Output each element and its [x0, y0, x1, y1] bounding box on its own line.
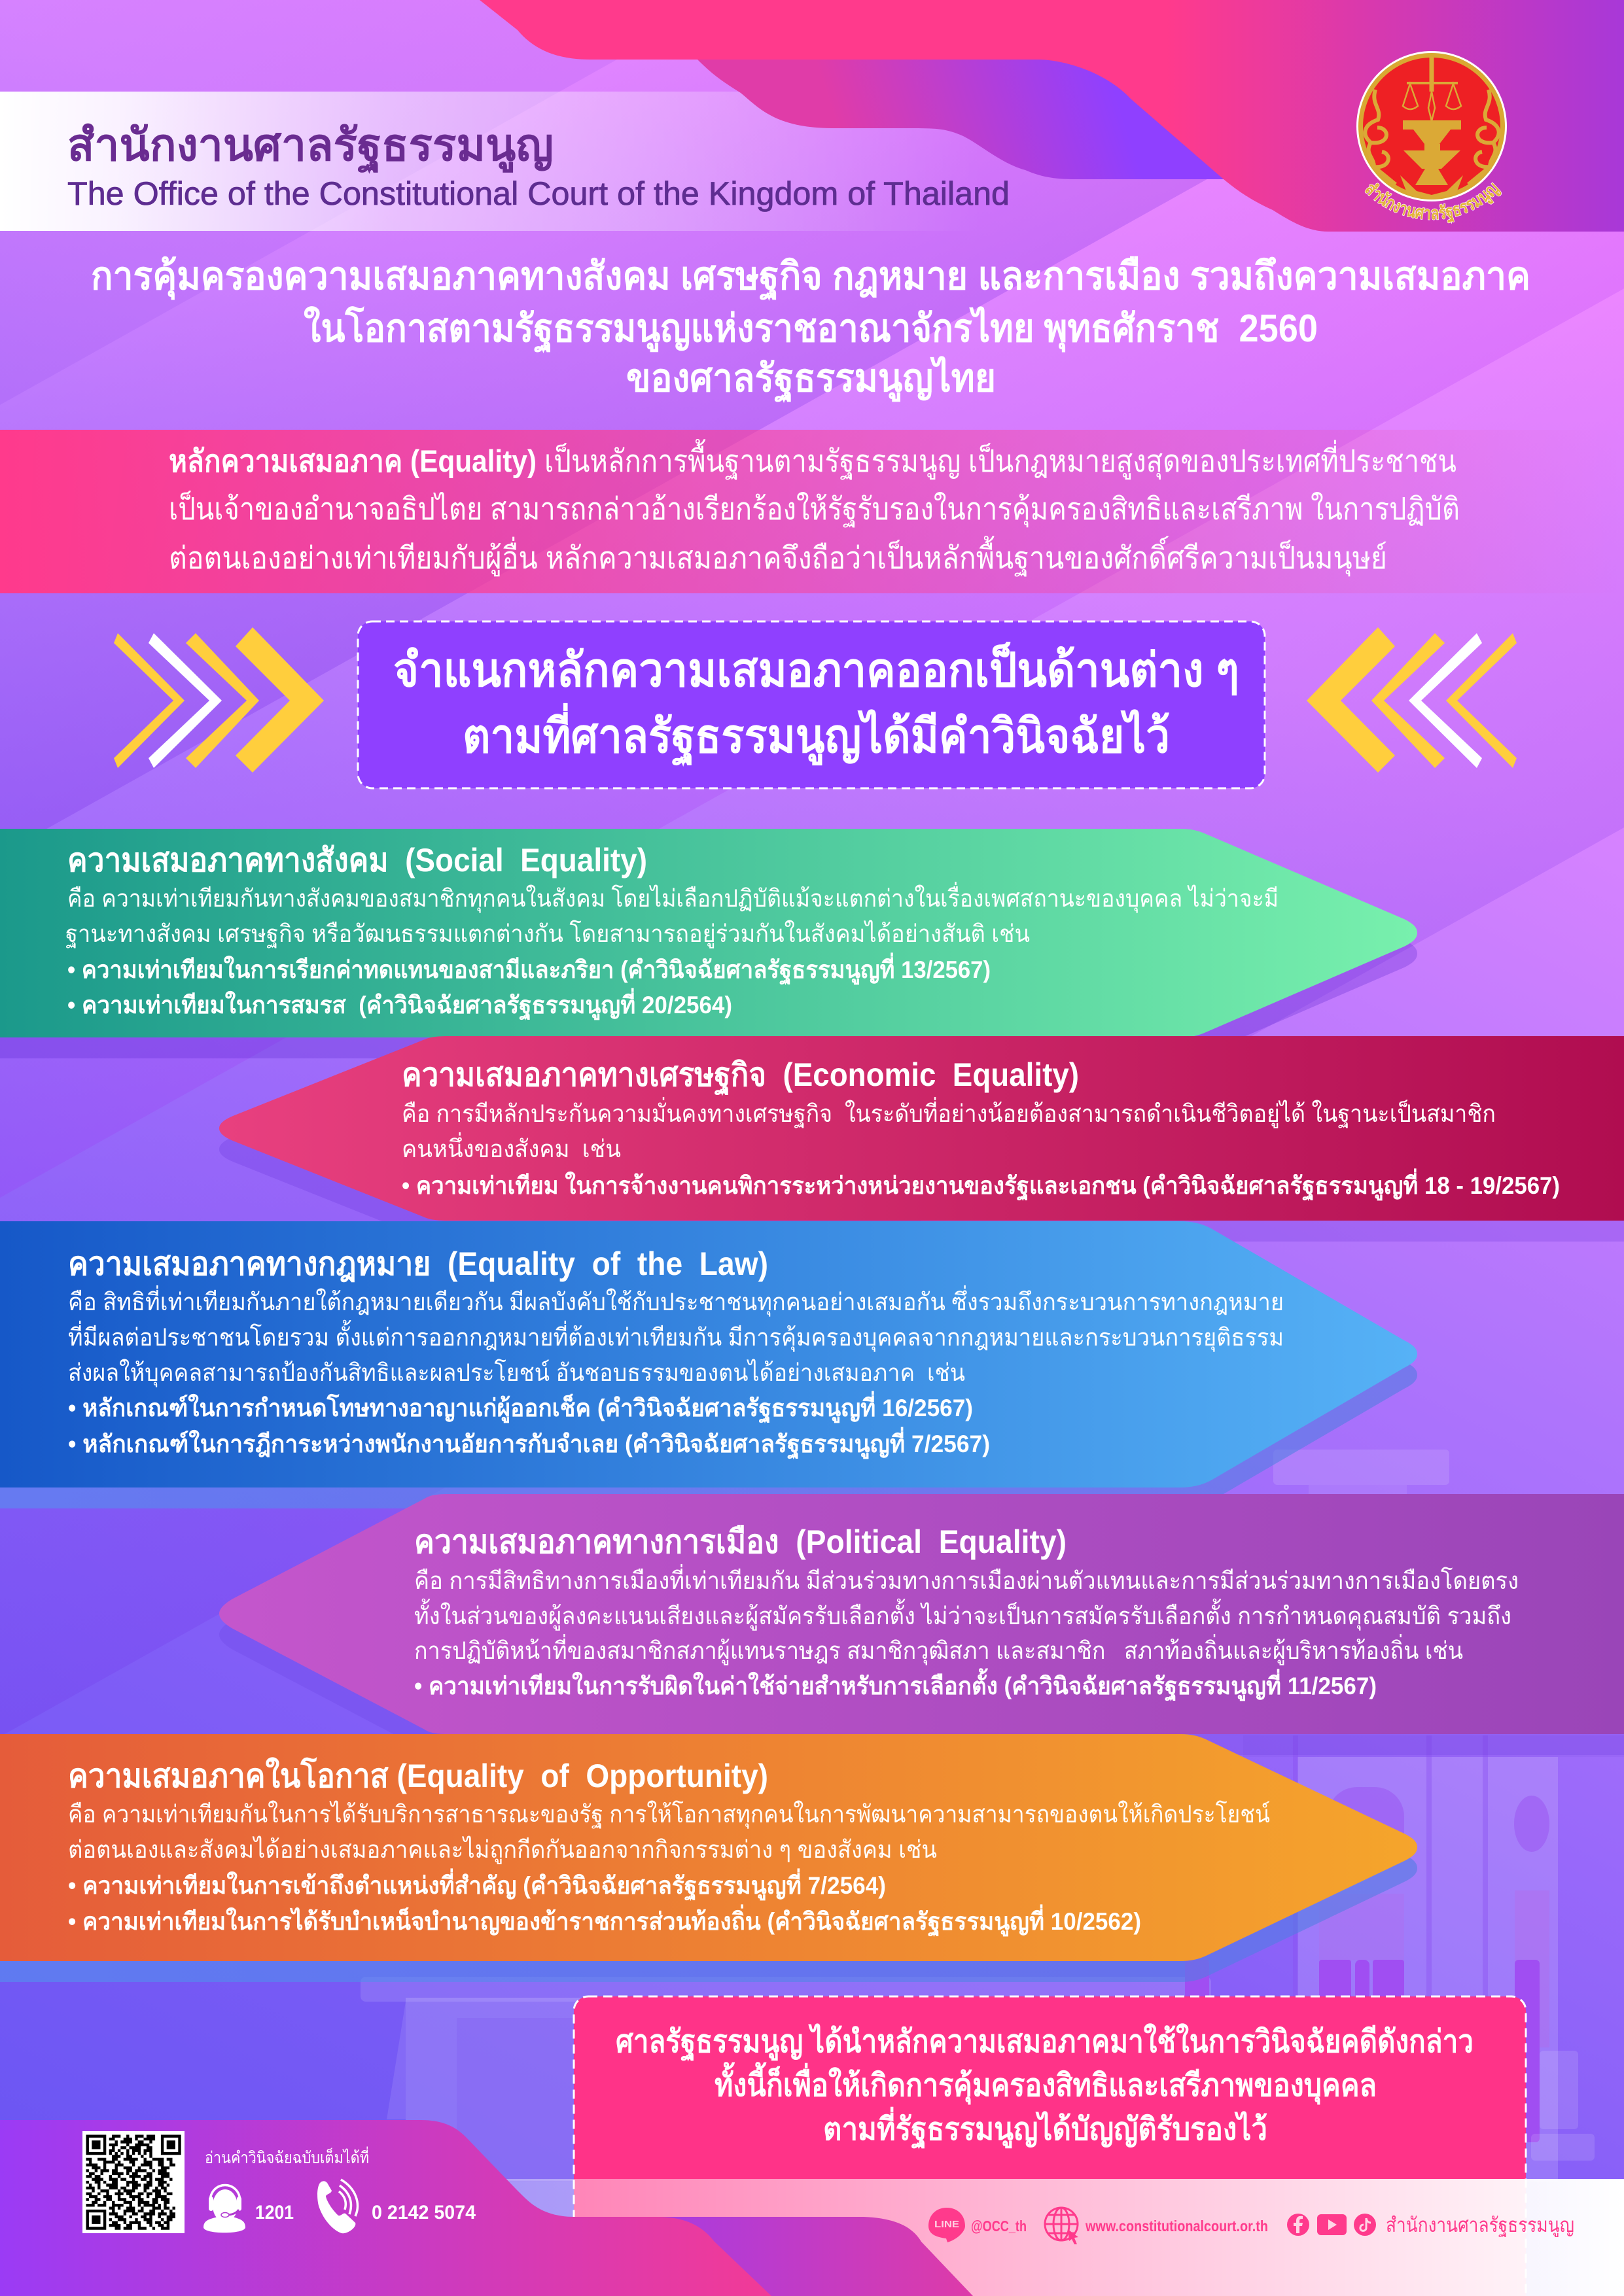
panel: equality of the law: [0, 1221, 1417, 1508]
economic equality text: คนหนึ่งของสังคม เช่น: [402, 1132, 621, 1162]
caption: read full ruling: อ่านคำวินิจฉัยฉบับเต็มได้ที่: [205, 2146, 369, 2167]
social equality heading: ความเสมอภาคทางสังคม (Social Equality): [67, 842, 647, 878]
icon: left chevrons: [114, 627, 324, 773]
icon: tiktok: [1354, 2214, 1376, 2236]
label: social account: สำนักงานศาลรัฐธรรมนูญ: [1386, 2214, 1574, 2237]
social equality text: • ความเท่าเทียมในการเรียกค่าทดแทนของสามีและภริยา (คำวินิจฉัยศาลรัฐธรรมนูญที่ 13/2567): [67, 952, 991, 985]
law text: • หลักเกณฑ์ในการกำหนดโทษทางอาญาแก่ผู้ออกเช็ค (คำวินิจฉัยศาลรัฐธรรมนูญที่ 16/2567): [68, 1391, 973, 1423]
panel: equality definition: [0, 430, 1624, 593]
callout: closing statement: ตามที่รัฐธรรมนูญได้บัญญัติรับรองไว้: [823, 2106, 1267, 2149]
definition text: เป็นเจ้าของอำนาจอธิปไตย สามารถกล่าวอ้างเรียกร้องให้รัฐรับรองในการคุ้มครองสิทธิและเสรีภาพ ในการปฏิบัติ: [169, 490, 1460, 528]
opportunity text: [68, 1800, 1270, 1937]
callout: closing statement: ศาลรัฐธรรมนูญ ได้นำหลักความเสมอภาคมาใช้ในการวินิจฉัยคดีดังกล่าว: [616, 2023, 1474, 2062]
callout: classification box: [358, 621, 1265, 788]
icon: line: [928, 2208, 965, 2242]
callout: classification box: ตามที่ศาลรัฐธรรมนูญได้มีคำวินิจฉัยไว้: [463, 703, 1170, 767]
law text: คือ สิทธิที่เท่าเทียมกันภายใต้กฎหมายเดียวกัน มีผลบังคับใช้กับประชาชนทุกคนอย่างเสมอกัน ซึ่งรวมถึงกระบวนการทางกฎหมาย: [68, 1285, 1284, 1317]
political text: [414, 1563, 1519, 1701]
definition text: [169, 439, 1460, 577]
header ribbon: second layer: [697, 52, 1230, 179]
definition text: ต่อตนเองอย่างเท่าเทียมกับผู้อื่น หลักความเสมอภาคจึงถือว่าเป็นหลักพื้นฐานของศักดิ์ศรีความเป็นมนุษย์: [169, 536, 1387, 577]
political heading: ความเสมอภาคทางการเมือง (Political Equality): [414, 1523, 1067, 1560]
law text: ส่งผลให้บุคคลสามารถป้องกันสิทธิและผลประโยชน์ อันชอบธรรมของตนได้อย่างเสมอภาค เช่น: [68, 1359, 965, 1387]
header heading: [67, 120, 1010, 212]
callout: closing statement: ทั้งนี้ก็เพื่อให้เกิดการคุ้มครองสิทธิและเสรีภาพของบุคคล: [715, 2062, 1377, 2105]
icon: globe: [1045, 2208, 1078, 2244]
header white band: [0, 92, 981, 231]
economic equality heading: ความเสมอภาคทางเศรษฐกิจ (Economic Equality): [402, 1056, 1079, 1096]
callout: closing statement: [574, 1996, 1526, 2296]
title: ของศาลรัฐธรรมนูญไทย: [626, 355, 996, 403]
english heading: The Office of the Constitutional Court of the Kingdom of Thailand: [67, 175, 1010, 212]
footer ribbon: back: [654, 2217, 973, 2296]
social equality text: ฐานะทางสังคม เศรษฐกิจ หรือวัฒนธรรมแตกต่างกัน โดยสามารถอยู่ร่วมกันในสังคมได้อย่างสันติ เช่น: [65, 920, 1030, 948]
title: [91, 254, 1530, 403]
title: ในโอกาสตามรัฐธรรมนูญแห่งราชอาณาจักรไทย พุทธศักราช 2560: [304, 305, 1318, 353]
label: hotline number: 1201: [255, 2202, 294, 2223]
icon: call centre agent: [203, 2185, 245, 2233]
icon: telephone: [317, 2180, 357, 2233]
political text: การปฏิบัติหน้าที่ของสมาชิกสภาผู้แทนราษฎร สมาชิกวุฒิสภา และสมาชิก สภาท้องถิ่นและผู้บริหารท้องถิ่น เช่น: [414, 1633, 1463, 1665]
opportunity text: ต่อตนเองและสังคมได้อย่างเสมอภาคและไม่ถูกกีดกันออกจากกิจกรรมต่าง ๆ ของสังคม เช่น: [68, 1835, 937, 1864]
social equality text: [65, 881, 1279, 1020]
social equality text: • ความเท่าเทียมในการสมรส (คำวินิจฉัยศาลรัฐธรรมนูญที่ 20/2564): [67, 988, 732, 1020]
background building illustration: [361, 1450, 1624, 2182]
definition text: เป็นหลักการพื้นฐานตามรัฐธรรมนูญ เป็นกฎหมายสูงสุดของประเทศที่ประชาชน: [544, 439, 1456, 480]
opportunity heading: ความเสมอภาคในโอกาส (Equality of Opportunity): [68, 1756, 768, 1794]
economic equality text: [402, 1096, 1560, 1201]
political text: ทั้งในส่วนของผู้ลงคะแนนเสียงและผู้สมัครรับเลือกตั้ง ไม่ว่าจะเป็นการสมัครรับเลือกตั้ง การกำหนดคุณสมบัติ รวมถึง: [414, 1598, 1511, 1631]
economic equality text: คือ การมีหลักประกันความมั่นคงทางเศรษฐกิจ ในระดับที่อย่างน้อยต้องสามารถดำเนินชีวิตอยู่ได้ ในฐานะเป็นสมาชิก: [402, 1096, 1496, 1128]
footer light band: [0, 2179, 1624, 2296]
callout: classification box: จำแนกหลักความเสมอภาคออกเป็นด้านต่าง ๆ: [393, 642, 1239, 697]
opportunity text: • ความเท่าเทียมในการเข้าถึงตำแหน่งที่สำคัญ (คำวินิจฉัยศาลรัฐธรรมนูญที่ 7/2564): [68, 1868, 886, 1901]
QR code: [82, 2131, 185, 2233]
icon: facebook: [1287, 2214, 1309, 2236]
social equality text: คือ ความเท่าเทียมกันทางสังคมของสมาชิกทุกคนในสังคม โดยไม่เลือกปฏิบัติแม้จะแตกต่างในเรื่องเพศสถานะของบุคคล ไม่ว่าจะมี: [67, 881, 1279, 913]
panel: social equality: [0, 829, 1417, 1058]
title: การคุ้มครองความเสมอภาคทางสังคม เศรษฐกิจ กฎหมาย และการเมือง รวมถึงความเสมอภาค: [91, 254, 1530, 301]
icon: court emblem: [1356, 51, 1507, 224]
opportunity text: คือ ความเท่าเทียมกันในการได้รับบริการสาธารณะของรัฐ การให้โอกาสทุกคนในการพัฒนาความสามารถของตนให้เกิดประโยชน์: [68, 1800, 1270, 1829]
economic equality text: • ความเท่าเทียม ในการจ้างงานคนพิการระหว่างหน่วยงานของรัฐและเอกชน (คำวินิจฉัยศาลรัฐธรรมนูญที่ 18 - 19/2567): [402, 1168, 1560, 1201]
header ribbon: pink: [480, 0, 1624, 232]
law text: • หลักเกณฑ์ในการฎีการะหว่างพนักงานอัยการกับจำเลย (คำวินิจฉัยศาลรัฐธรรมนูญที่ 7/2567): [68, 1427, 990, 1459]
law text: [68, 1285, 1284, 1459]
panel: political equality: [219, 1494, 1624, 1755]
law heading: ความเสมอภาคทางกฎหมาย (Equality of the Law): [68, 1245, 768, 1282]
icon: line: LINE: [934, 2219, 959, 2230]
icon: right chevrons: [1307, 627, 1517, 773]
label: telephone number: 0 2142 5074: [372, 2202, 476, 2223]
footer ribbon: front: [0, 2120, 771, 2296]
law text: ที่มีผลต่อประชาชนโดยรวม ตั้งแต่การออกกฎหมายที่ต้องเท่าเทียมกัน มีการคุ้มครองบุคคลจากกฎหมายและกระบวนการยุติธรรม: [68, 1319, 1284, 1352]
opportunity text: • ความเท่าเทียมในการได้รับบำเหน็จบำนาญของข้าราชการส่วนท้องถิ่น (คำวินิจฉัยศาลรัฐธรรมนูญที่ 10/2562): [68, 1904, 1141, 1937]
icon: youtube: [1317, 2214, 1347, 2235]
political text: คือ การมีสิทธิทางการเมืองที่เท่าเทียมกัน มีส่วนร่วมทางการเมืองผ่านตัวแทนและการมีส่วนร่วมทางการเมืองโดยตรง: [414, 1563, 1519, 1594]
label: website: www.constitutionalcourt.or.th: [1085, 2218, 1268, 2235]
definition text: หลักความเสมอภาค (Equality): [169, 444, 537, 478]
label: line account: @OCC_th: [971, 2218, 1027, 2235]
panel: economic equality: [219, 1036, 1624, 1242]
thai heading: สำนักงานศาลรัฐธรรมนูญ: [67, 120, 554, 174]
political text: • ความเท่าเทียมในการรับผิดในค่าใช้จ่ายสำหรับการเลือกตั้ง (คำวินิจฉัยศาลรัฐธรรมนูญที่ 11/2567): [414, 1668, 1377, 1701]
emblem caption: สำนักงานศาลรัฐธรรมนูญ: [1365, 182, 1502, 224]
panel: equality of opportunity: [0, 1734, 1417, 1982]
